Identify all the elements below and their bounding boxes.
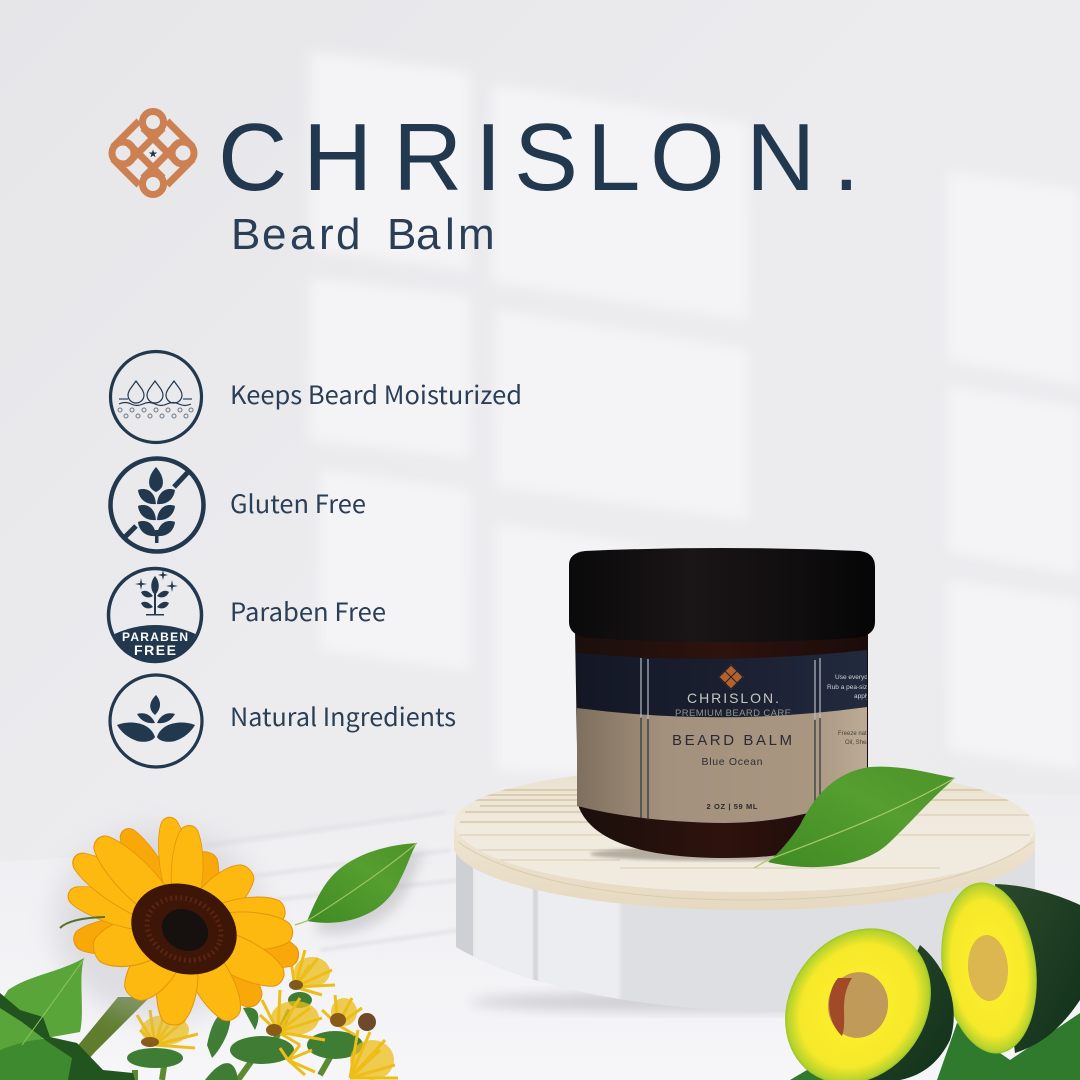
platform: concrete and wood podium: [454, 765, 1035, 1020]
label: mini logo: [718, 664, 744, 690]
wood edge: [454, 822, 1035, 910]
label: side directions: [828, 674, 867, 700]
right avocado face: [932, 877, 1046, 1059]
label: side directions: Use everyday: [835, 674, 875, 681]
label: side directions: Rub a pea-sized: [827, 684, 875, 691]
label: Paraben Free: [230, 593, 386, 629]
front petals: [64, 815, 293, 1028]
small yellow flowers: [127, 950, 398, 1080]
label: scent: Blue Ocean: [702, 756, 763, 768]
concrete base: [456, 850, 1035, 1012]
left avocado skin: [860, 945, 954, 1080]
right avocado pit cavity: [966, 934, 1010, 1002]
stem: [45, 997, 150, 1080]
icon: crossed wheat: [110, 458, 204, 552]
avocado pair: [755, 877, 1080, 1080]
subtitle: Beard Balm: [231, 210, 495, 259]
jar lid: [569, 548, 875, 642]
foreground leaves: [0, 958, 135, 1080]
label: side notes: Freeze natural: [838, 731, 877, 737]
leaf on podium: [754, 767, 955, 868]
label: side directions: apply: [854, 693, 870, 700]
icon: water drops on skin: [110, 352, 202, 442]
label: side notes: Oil, Shea: [845, 740, 870, 746]
sepal: [60, 917, 105, 928]
label: tagline: PREMIUM BEARD CARE: [675, 708, 791, 719]
benefit: keeps beard moisturized: [110, 352, 522, 442]
label: product name: BEARD BALM: [672, 732, 792, 749]
label: size: 2 OZ | 59 ML: [706, 802, 758, 811]
seed disk: [117, 868, 251, 990]
jar body: [575, 630, 868, 858]
label: Gluten Free: [230, 485, 366, 521]
left avocado face: [755, 900, 961, 1080]
label: side notes: [838, 730, 867, 745]
icon: paraben free badge: PARABEN: [122, 630, 188, 644]
right avocado skin: [995, 884, 1080, 1053]
benefit: paraben free: [108, 568, 386, 662]
avocado leaves: [790, 1013, 1080, 1080]
title: brand name: CHRISLON.: [218, 104, 860, 211]
icon: leaves: [110, 675, 202, 767]
wood top: [454, 765, 1035, 892]
back petals: [72, 822, 303, 1017]
label: navy band: [576, 650, 867, 717]
left avocado pit: [823, 967, 893, 1043]
sunflower: [45, 815, 303, 1080]
benefit list: [108, 352, 522, 767]
product jar: [569, 548, 877, 861]
benefit: gluten free: [110, 458, 366, 552]
logo: brand mark: [112, 112, 194, 194]
benefit: natural ingredients: [110, 675, 456, 767]
icon: paraben free badge: FREE: [134, 642, 176, 658]
floating leaf: [295, 843, 425, 934]
petals: [64, 815, 303, 1028]
petal shadow: [55, 830, 265, 1020]
icon: paraben free badge: [108, 568, 202, 662]
label: Natural Ingredients: [230, 698, 456, 734]
label: brand: CHRISLON.: [687, 690, 779, 706]
label: Keeps Beard Moisturized: [230, 376, 522, 412]
label: tan band: [577, 707, 867, 823]
